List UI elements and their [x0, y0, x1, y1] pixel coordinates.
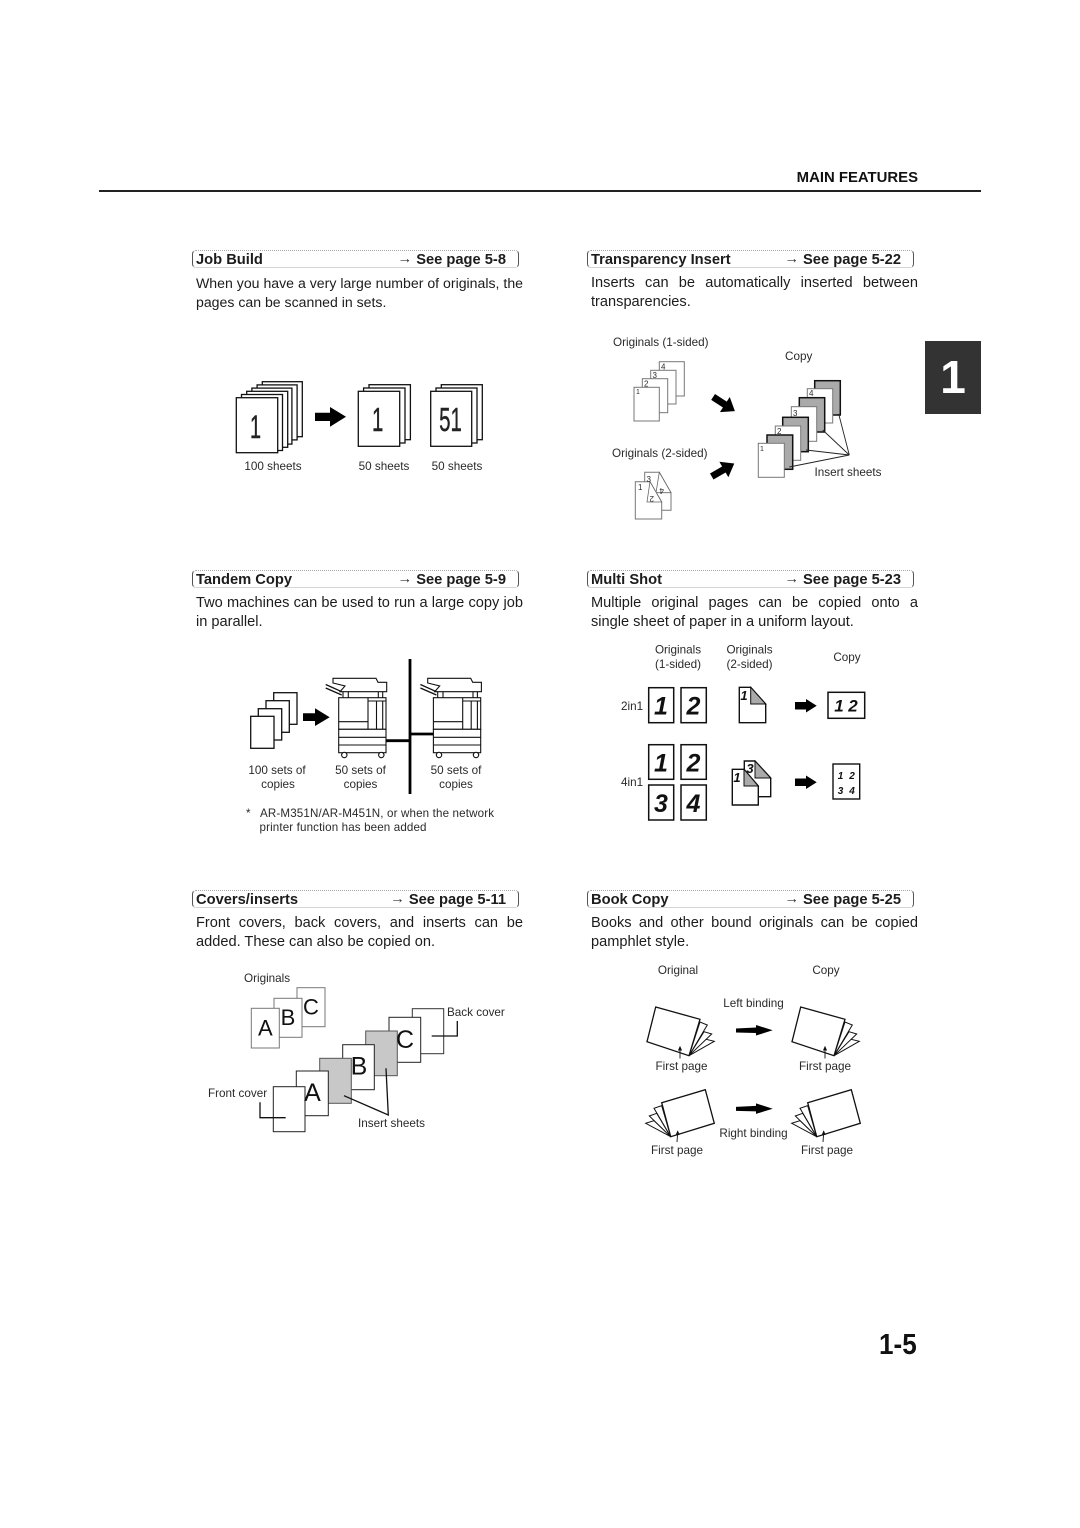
right binding row: First page: [651, 1144, 703, 1157]
4in1 row: 1: [733, 770, 741, 785]
originals 1-sided: [613, 336, 709, 421]
heading: Job Build: Job Build: [196, 252, 263, 268]
left printer: copies: [344, 778, 378, 791]
footnote: [246, 807, 494, 834]
diagram: book copy: [644, 964, 862, 1157]
heading: Transparency Insert: Transparency Insert: [591, 252, 731, 268]
originals 2-sided: 4: [659, 486, 664, 495]
text: Tandem Copy description: [196, 595, 523, 630]
originals A B C: B: [281, 1005, 295, 1030]
2in1 row: 1: [740, 688, 748, 703]
footnote: printer function has been added: [260, 821, 426, 834]
second set of 50 sheets: 50 sheets: [432, 460, 482, 473]
column labels: [655, 644, 861, 671]
text: Job Build description: When you have a very large number of originals, the: [196, 275, 523, 291]
back cover label: Back cover: [447, 1006, 505, 1019]
originals 1-sided: 3: [652, 371, 658, 380]
originals 1-sided: 1: [636, 389, 640, 396]
section title: MAIN FEATURES: [797, 170, 918, 186]
originals A B C: [244, 972, 325, 1048]
heading: Book Copy: [587, 890, 914, 908]
insert sheets label: Insert sheets: [358, 1117, 425, 1130]
arrow: 1-sided to copy: [708, 389, 740, 419]
text: Multi Shot description: [591, 595, 918, 630]
panel: Transparency Insert: [587, 250, 918, 520]
copy stack: A: [304, 1079, 321, 1107]
originals stack: 100 sets of: [248, 764, 306, 777]
column labels: (1-sided): [655, 658, 701, 671]
diagram: covers and inserts: [208, 972, 505, 1132]
copy stack with insert sheets: Copy: [785, 350, 812, 363]
text: Covers/inserts description: added. These can also be copied on.: [196, 934, 435, 950]
panel: Multi Shot: [587, 570, 918, 821]
text: Book Copy description: [591, 915, 918, 950]
text: Covers/inserts description: Front covers, back covers, and inserts can be: [196, 915, 523, 931]
column labels: [658, 964, 840, 977]
copy stack with insert sheets: 1: [760, 446, 764, 453]
originals 2-sided: Originals (2-sided): [612, 447, 708, 460]
arrow: [315, 407, 346, 427]
text: Transparency Insert description: Inserts can be automatically inserted between: [591, 275, 918, 291]
footnote: *: [246, 807, 251, 820]
text: Transparency Insert description: [591, 275, 918, 310]
4in1 row: 2: [848, 771, 855, 782]
originals A B C: A: [258, 1016, 273, 1040]
originals A B C: Originals: [244, 972, 290, 985]
front cover label: Front cover: [208, 1087, 267, 1100]
text: Covers/inserts description: [196, 915, 523, 950]
stack of 100 sheets: 1: [250, 409, 261, 445]
copy stack with insert sheets: [758, 350, 882, 479]
originals 2-sided: [612, 447, 708, 519]
originals 1-sided: 4: [661, 362, 666, 372]
column labels: Originals: [655, 644, 701, 656]
arrow: [303, 708, 330, 726]
text: Book Copy description: Books and other bound originals can be copied: [591, 915, 918, 931]
copy stack with insert sheets: 4: [809, 389, 814, 398]
4in1 row: 1: [654, 750, 668, 778]
2in1 row: 2: [847, 696, 858, 716]
left binding row: Left binding: [723, 997, 784, 1010]
copy stack: C: [396, 1026, 414, 1054]
left binding row: First page: [799, 1060, 851, 1073]
4in1 row: 3: [746, 761, 754, 776]
originals stack: copies: [261, 778, 295, 791]
originals 2-sided: 2: [649, 494, 654, 503]
first set of 50 sheets: 1: [372, 401, 383, 438]
4in1 row: 4: [686, 790, 701, 818]
insert sheets label: [344, 1068, 425, 1130]
heading: Multi Shot: Multi Shot: [591, 572, 662, 588]
copy stack with insert sheets: Insert sheets: [814, 466, 882, 479]
heading: Transparency Insert: [587, 250, 914, 268]
text: Book Copy description: pamphlet style.: [591, 934, 689, 950]
text: Job Build description: pages can be scanned in sets.: [196, 294, 386, 310]
heading: Covers/inserts: → See page 5-11: [390, 891, 506, 908]
diagram: multi shot: [621, 644, 866, 821]
first set of 50 sheets: 50 sheets: [359, 460, 409, 473]
left binding row: [647, 997, 859, 1073]
copy stack with insert sheets: 2: [777, 427, 782, 436]
heading: Multi Shot: → See page 5-23: [784, 571, 901, 588]
column labels: (2-sided): [726, 658, 773, 671]
column labels: Copy: [812, 964, 840, 977]
right binding row: [646, 1090, 860, 1157]
arrow: 2-sided to copy: [707, 456, 739, 484]
text: Multi Shot description: Multiple original pages can be copied onto a: [591, 595, 918, 611]
right printer: 50 sets of: [431, 764, 482, 777]
originals 1-sided: 2: [644, 380, 649, 388]
right printer: [420, 678, 482, 791]
left printer: [326, 678, 387, 791]
2in1 row: 1: [834, 696, 844, 716]
text: Tandem Copy description: Two machines can be used to run a large copy job: [196, 595, 523, 611]
left binding row: First page: [656, 1060, 707, 1073]
4in1 row: 4: [848, 786, 855, 797]
heading: Transparency Insert: → See page 5-22: [784, 251, 901, 268]
stack of 100 sheets: [236, 382, 302, 473]
column labels: Copy: [833, 651, 861, 664]
panel: Job Build: [192, 250, 523, 473]
panel: Covers/inserts: [192, 890, 523, 1132]
diagram: job build sheets: [236, 381, 483, 473]
footnote: AR-M351N/AR-M451N, or when the network: [260, 807, 494, 820]
originals 2-sided: 3: [646, 475, 652, 484]
chapter tab 1: [925, 341, 981, 414]
4in1 row: 3: [654, 790, 668, 818]
left printer: 50 sets of: [335, 764, 387, 777]
2in1 row: 1: [654, 692, 668, 720]
second set of 50 sheets: 51: [439, 401, 462, 438]
diagram: tandem copy: [246, 659, 494, 834]
heading: Tandem Copy: [192, 570, 519, 588]
right printer: copies: [439, 778, 473, 791]
copy stack with insert sheets: 3: [793, 409, 798, 418]
panel: Book Copy: [587, 890, 918, 1157]
text: Multi Shot description: single sheet of paper in a uniform layout.: [591, 614, 854, 630]
2in1 row: 2: [686, 692, 701, 720]
originals A B C: C: [303, 994, 319, 1020]
originals 2-sided: 1: [638, 483, 643, 492]
right binding row: Right binding: [719, 1127, 788, 1140]
second set of 50 sheets: [431, 385, 482, 473]
page number: 1-5: [879, 1329, 917, 1361]
chapter tab 1: 1: [940, 351, 966, 403]
4in1 row: 2: [686, 750, 701, 778]
text: Tandem Copy description: in parallel.: [196, 614, 263, 630]
network line: [386, 659, 434, 794]
front cover label: [208, 1087, 286, 1118]
copy stack: [273, 1009, 444, 1132]
diagram: transparency insert: [612, 336, 882, 520]
heading: Book Copy: → See page 5-25: [784, 891, 901, 908]
heading: Job Build: [192, 250, 519, 268]
column labels: Originals: [726, 644, 773, 656]
heading: Book Copy: Book Copy: [591, 892, 669, 908]
heading: Tandem Copy: Tandem Copy: [196, 572, 292, 588]
heading: Covers/inserts: Covers/inserts: [196, 892, 298, 908]
column labels: Original: [658, 964, 698, 977]
4in1 row: 1: [838, 771, 844, 782]
4in1 row: [621, 745, 860, 820]
heading: Job Build: → See page 5-8: [398, 251, 506, 268]
2in1 row: [621, 687, 865, 723]
4in1 row: 3: [838, 786, 844, 797]
panel: Tandem Copy: [192, 570, 523, 834]
copy stack: B: [351, 1052, 367, 1080]
text: Transparency Insert description: transparencies.: [591, 294, 691, 310]
heading: Covers/inserts: [192, 890, 519, 908]
originals 1-sided: Originals (1-sided): [613, 336, 709, 349]
heading: Tandem Copy: → See page 5-9: [398, 571, 506, 588]
back cover label: [432, 1006, 505, 1036]
right binding row: First page: [801, 1144, 853, 1157]
heading: Multi Shot: [587, 570, 914, 588]
first set of 50 sheets: [358, 385, 410, 473]
2in1 row: 2in1: [621, 700, 643, 713]
text: Job Build description: [196, 275, 523, 310]
originals stack: [248, 693, 306, 791]
stack of 100 sheets: 100 sheets: [244, 460, 302, 473]
4in1 row: 4in1: [621, 776, 643, 789]
